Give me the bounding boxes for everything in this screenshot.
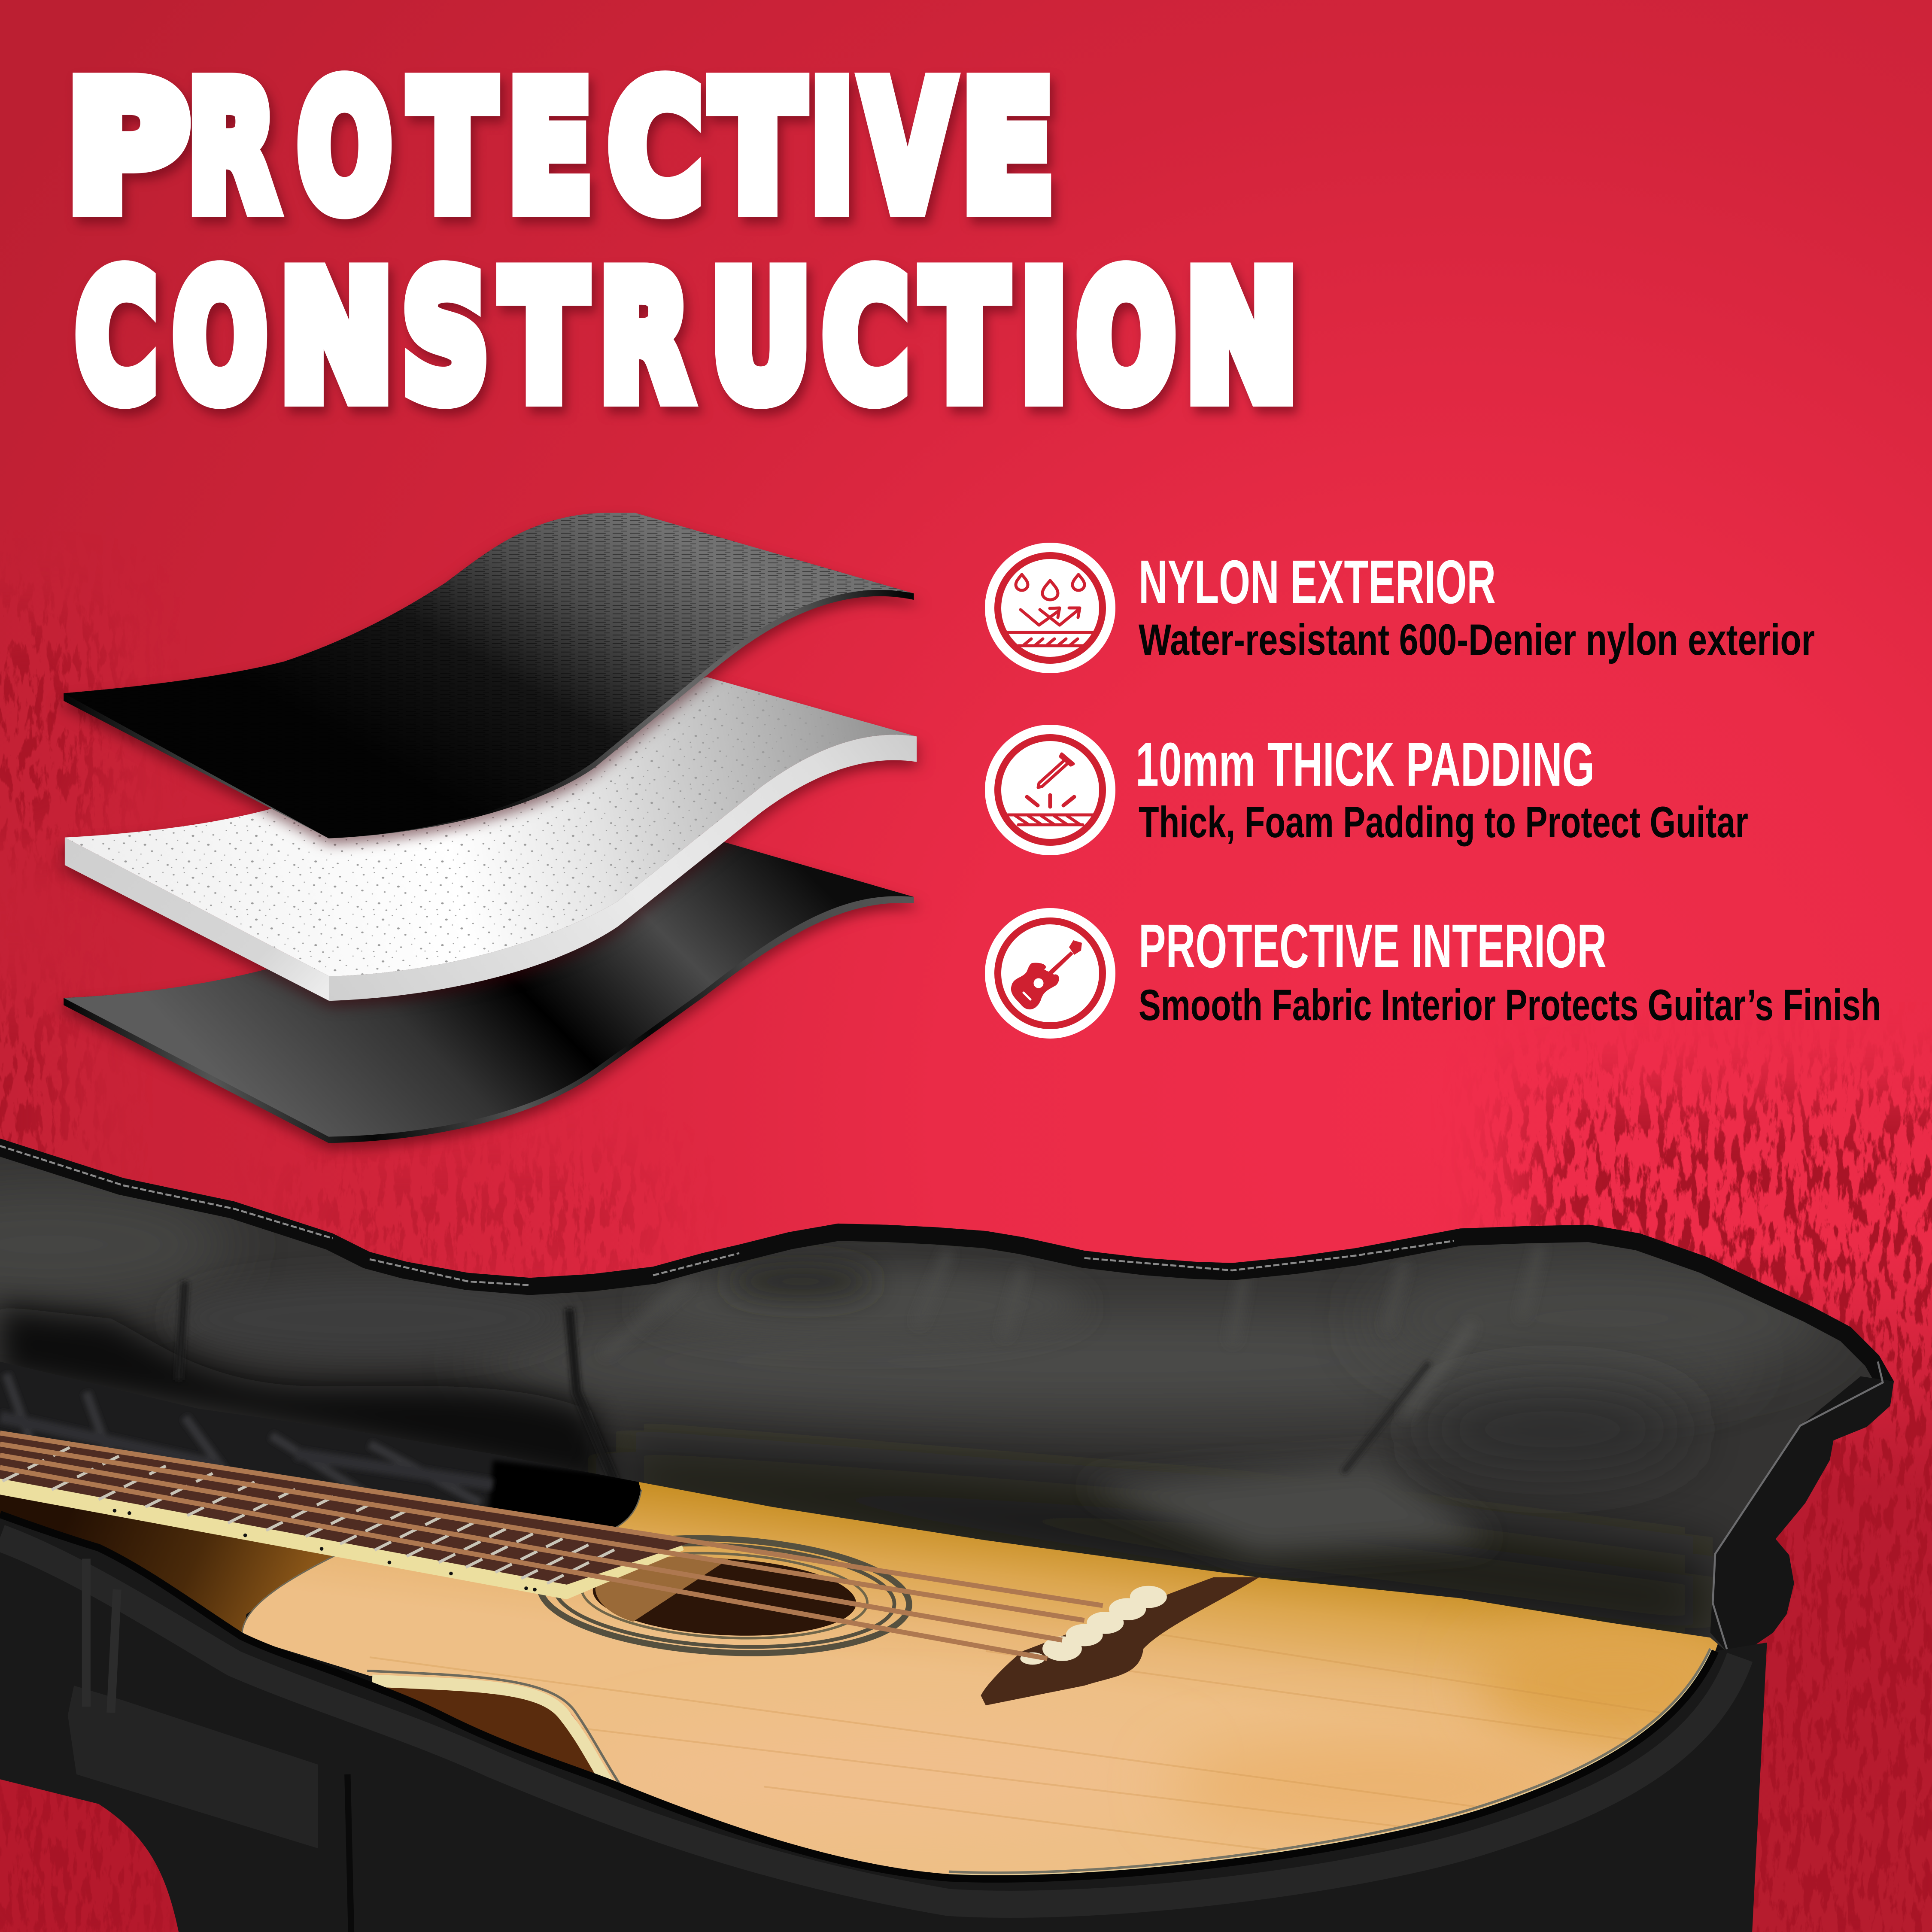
title line 1: I <box>811 49 854 248</box>
fretboard <box>0 1433 690 1599</box>
middle layer: foam padding <box>65 677 917 1001</box>
title line 1: O <box>298 49 391 248</box>
title line 2: I <box>1020 238 1068 438</box>
title line 2: U <box>711 238 811 438</box>
open flap <box>0 1133 1898 1663</box>
title line 2: R <box>599 238 690 438</box>
title line 2: O <box>173 238 267 438</box>
case front with handle <box>0 1514 1767 1932</box>
title line 2: C <box>823 238 908 438</box>
heading: PROTECTIVE INTERIOR <box>1139 911 1607 981</box>
item: thick padding <box>985 725 1748 855</box>
title line 2: S <box>402 238 489 438</box>
interior lining <box>0 1349 665 1589</box>
guitar body <box>0 1429 1750 1898</box>
title line 2: T <box>502 238 586 438</box>
title line 2: N <box>279 238 393 438</box>
title line 1: V <box>863 49 953 248</box>
item: protective interior <box>985 908 1881 1039</box>
feature list <box>985 543 1881 1039</box>
icon: acoustic guitar <box>985 908 1115 1039</box>
icon: water droplets bouncing off fabric <box>985 543 1115 673</box>
title line 1: T <box>411 49 495 248</box>
title <box>67 49 1298 438</box>
bridge <box>981 1577 1259 1705</box>
bottom layer: smooth fabric <box>64 840 914 1143</box>
item: nylon exterior <box>985 543 1815 673</box>
title line 1: E <box>508 49 592 248</box>
heading: NYLON EXTERIOR <box>1139 547 1496 617</box>
layered material diagram <box>64 513 917 1143</box>
title line 2: C <box>76 238 157 438</box>
bridge pins <box>1020 1586 1167 1665</box>
strings <box>0 1433 1103 1659</box>
title line 1: R <box>188 49 276 248</box>
title line 2: O <box>1077 238 1175 438</box>
description: Thick, Foam Padding to Protect Guitar <box>1139 798 1748 847</box>
icon: nail against padding <box>985 725 1115 855</box>
title line 1: T <box>713 49 804 248</box>
title line 1: E <box>962 49 1054 248</box>
title line 2: N <box>1185 238 1298 438</box>
gig bag with acoustic guitar <box>0 1133 1898 1932</box>
heading: 10mm THICK PADDING <box>1136 730 1595 799</box>
title line 1: P <box>67 49 188 248</box>
case interior base <box>0 1479 1756 1929</box>
cutaway <box>376 1683 606 1789</box>
sound hole <box>537 1529 912 1662</box>
title line 1: C <box>609 49 702 248</box>
top layer: nylon exterior <box>64 513 914 838</box>
title line 2: T <box>923 238 1007 438</box>
